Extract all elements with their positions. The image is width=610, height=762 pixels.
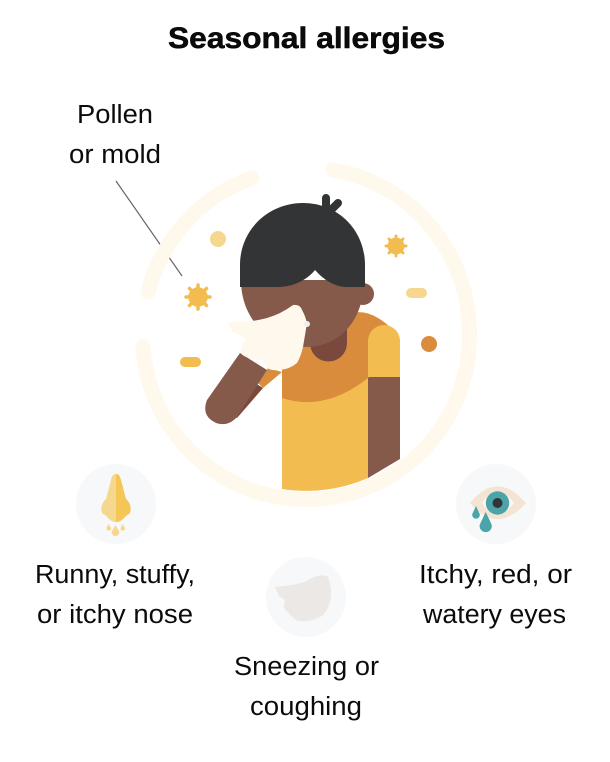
label: sneezing [234, 653, 380, 721]
label: nose: Runny, stuffy, [35, 561, 195, 589]
label: eyes: watery eyes [422, 601, 566, 629]
ear [352, 283, 374, 305]
pollen: left spore [186, 285, 210, 309]
icon: nose [76, 464, 156, 544]
shirt collar [282, 312, 400, 402]
forearm [205, 353, 267, 424]
neck [310, 320, 347, 362]
pollen: circle top left [210, 231, 226, 247]
sleeve [368, 325, 400, 377]
person [205, 198, 400, 491]
icon: eye [456, 464, 536, 544]
title: Seasonal allergies [168, 22, 445, 55]
label: nose: or itchy nose [37, 601, 193, 629]
hair [240, 203, 365, 287]
label: pollen or mold: Pollen [77, 101, 153, 129]
right arm and sleeve [368, 377, 400, 478]
sleeve cuff [258, 368, 282, 388]
label: sneezing: Sneezing or [234, 653, 380, 681]
tissue dot [304, 321, 310, 327]
label: eyes [419, 561, 573, 629]
pollen: pill left [180, 357, 201, 367]
pointer line [116, 181, 182, 276]
label: sneezing: coughing [250, 693, 362, 721]
forearm shade [228, 383, 263, 418]
tissue [227, 305, 307, 370]
pollen: right spore [386, 236, 406, 256]
torso [282, 370, 368, 491]
label: pollen or mold: or mold [69, 141, 161, 169]
icon: tissue [266, 557, 346, 637]
pollen: orange dot [421, 336, 437, 352]
pollen: pill right [406, 288, 427, 298]
label: pollen or mold [69, 101, 161, 169]
ring [143, 170, 470, 500]
hair strands [326, 198, 338, 214]
face [241, 280, 364, 347]
label: eyes: Itchy, red, or [419, 561, 573, 589]
label: nose [35, 561, 195, 629]
